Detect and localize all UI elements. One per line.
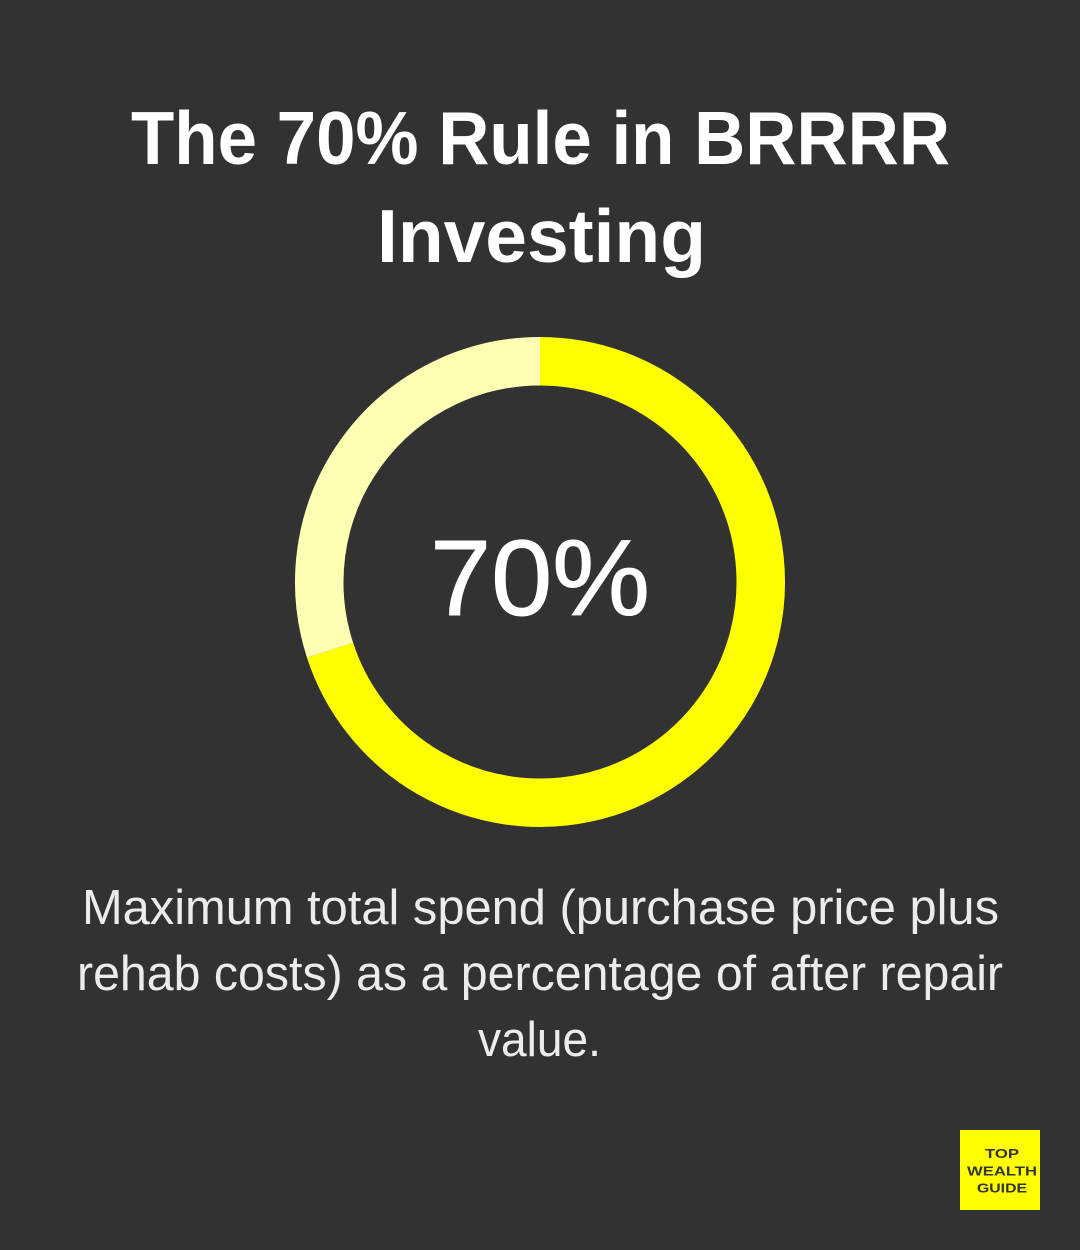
donut chart: 70% — [319, 361, 761, 803]
logo: Top Wealth Guide — [960, 1130, 1040, 1210]
description text — [77, 881, 1003, 1067]
description text: Maximum total spend (purchase price plus — [82, 881, 999, 935]
center value: 70% — [430, 517, 650, 638]
title — [131, 96, 950, 278]
description text: value. — [478, 1013, 601, 1067]
chart segment: remaining 30% — [319, 361, 540, 650]
description text: rehab costs) as a percentage of after repair — [77, 947, 1003, 1001]
title: Investing — [377, 194, 706, 278]
logo: Top Wealth Guide: TOP — [985, 1147, 1019, 1161]
logo: Top Wealth Guide: WEALTH — [967, 1164, 1037, 1178]
chart segment: 70% — [330, 361, 761, 803]
title: The 70% Rule in BRRRR — [131, 96, 950, 180]
logo: Top Wealth Guide: GUIDE — [977, 1182, 1027, 1196]
